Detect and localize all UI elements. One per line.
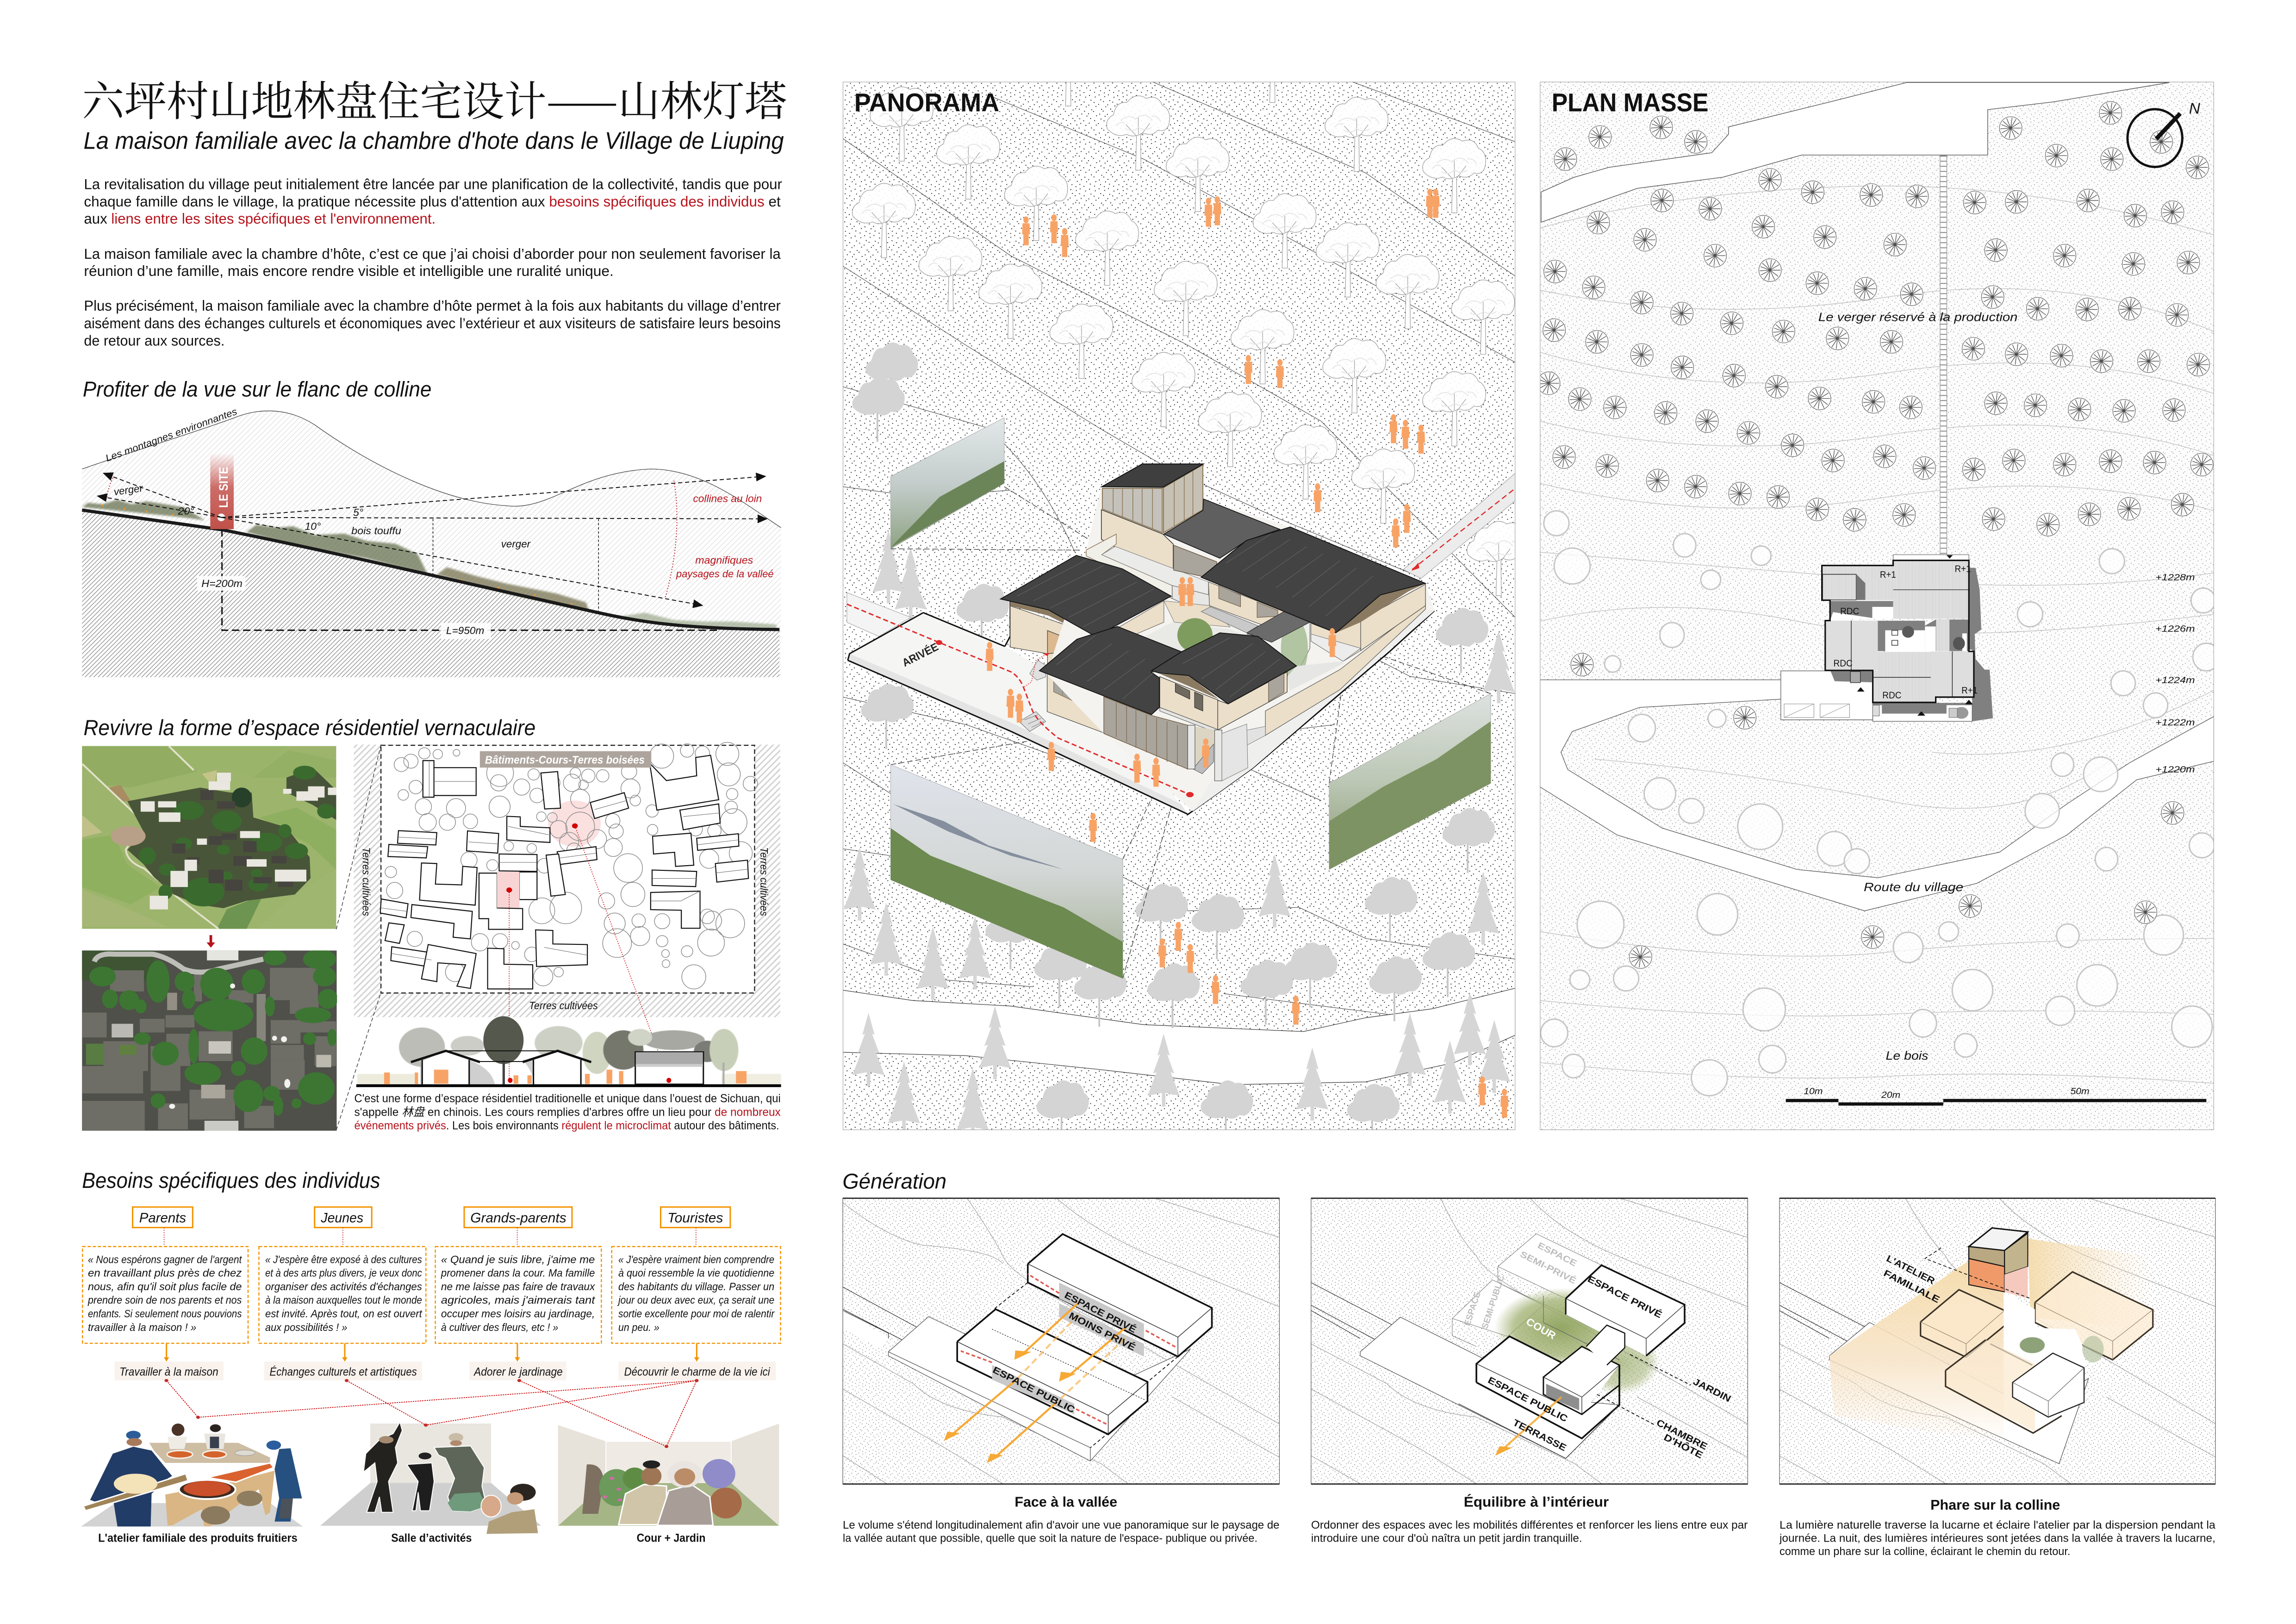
caption: equilibre: Équilibre à l’intérieur xyxy=(1464,1494,1609,1510)
persona: grands-parents: Adorer le jardinage xyxy=(473,1366,563,1378)
volumes xyxy=(1921,1290,2004,1357)
section diagram: hillside view: H=200m xyxy=(201,578,243,589)
forest trees xyxy=(1541,511,2220,1096)
section diagram: hillside view: verger xyxy=(113,482,144,498)
labels: elevations: +1220m xyxy=(2155,765,2195,775)
panel: face a la vallee xyxy=(843,1198,1279,1484)
thin volumes xyxy=(1452,1234,1601,1337)
text: linpan caption: s'appelle 林盘 en chinois. Les cours remplies d'arbres offre un lieu pour de nombreux xyxy=(355,1106,781,1118)
persona: touristes: Touristes xyxy=(667,1210,723,1225)
section diagram: hillside view: Les montagnes environnantes xyxy=(104,406,239,464)
village road xyxy=(1540,680,2214,911)
diagram: map of linpan xyxy=(336,743,780,1130)
labels: elevations: +1224m xyxy=(2155,675,2195,685)
persona: jeunes: Échanges culturels et artistiques xyxy=(270,1366,417,1378)
front walls xyxy=(1104,672,1287,781)
persona: parents: « Nous espérons gagner de l'argent xyxy=(88,1254,243,1266)
labels: plan: Le verger réservé à la production xyxy=(1818,310,2017,324)
arrow: red down xyxy=(206,935,215,948)
scene captions: Cour + Jardin xyxy=(637,1532,705,1545)
caption: face a la vallee: Face à la vallée xyxy=(1014,1494,1117,1510)
labels: plan: Le bois xyxy=(1886,1049,1928,1062)
labels: volumes 2: ESPACE xyxy=(1462,1291,1483,1327)
labels: floors: RDC xyxy=(1840,606,1859,617)
subtitle: La maison familiale avec la chambre d'hote dans le Village de Liuping xyxy=(83,127,784,154)
intro text: chaque famille dans le village, la pratique nécessite plus d'attention aux besoins spécifiques des individus et xyxy=(84,193,781,210)
marker: le site xyxy=(210,453,234,529)
scene captions: L'atelier familiale des produits fruitiers xyxy=(98,1532,298,1545)
scale bar xyxy=(1786,1100,2206,1104)
caption: phare: comme un phare sur la colline, éclairant le chemin du retour. xyxy=(1780,1545,2070,1558)
text: linpan caption: événements privés. Les bois environnants régulent le microclimat autour des bâtiments. xyxy=(355,1119,779,1132)
orchard trees xyxy=(852,28,1530,596)
caption: equilibre xyxy=(1311,1494,1748,1545)
section diagram: hillside view: 20° xyxy=(178,505,194,517)
labels: volumes 2: CHAMBRE xyxy=(1655,1418,1709,1452)
persona: grands-parents xyxy=(436,1207,601,1380)
marker: le site: LE SITE xyxy=(217,467,230,508)
persona: touristes: jour ou deux avec eux, ça serait une xyxy=(617,1294,774,1306)
orchard trees xyxy=(1537,101,2213,968)
labels: floors: R+1 xyxy=(1880,570,1896,580)
heading: besoins: Besoins spécifiques des individus xyxy=(82,1168,380,1193)
labels: volumes 2: SEMI-PRIVÉ xyxy=(1518,1249,1578,1286)
labels: elevations: +1222m xyxy=(2155,718,2195,728)
footprint xyxy=(1047,463,1434,811)
scene: salle xyxy=(320,1422,541,1534)
intro text: La revitalisation du village peut initialement être lancée par une planification de la collectivité, tandis que pour xyxy=(84,175,782,192)
scene: cour et jardin xyxy=(558,1424,779,1526)
heading: vue: Profiter de la vue sur le flanc de colline xyxy=(83,377,431,401)
title: 六坪村山地林盘住宅设计——山林灯塔 xyxy=(82,68,787,128)
courtyard xyxy=(1120,582,1361,691)
links: needs to spaces xyxy=(164,1379,698,1448)
intro text: aux liens entre les sites spécifiques et l'environnement. xyxy=(84,210,436,227)
label: plan masse: PLAN MASSE xyxy=(1552,88,1708,117)
labels: volumes 2: ESPACE PUBLIC xyxy=(1486,1375,1569,1424)
persona: touristes: un peu. » xyxy=(618,1321,660,1333)
retaining wall xyxy=(1193,603,1434,811)
section diagram: hillside view: collines au loin xyxy=(693,493,762,504)
scenes xyxy=(81,1422,779,1534)
persona: grands-parents: ne me laisse pas faire de travaux xyxy=(441,1280,596,1293)
panel: phare sur la colline xyxy=(1780,1198,2215,1484)
labels: floors xyxy=(1834,564,1978,700)
route: arrival path xyxy=(847,604,1194,797)
persona: jeunes xyxy=(259,1207,426,1380)
light glow xyxy=(1829,1238,2156,1444)
photo: aerial linpan xyxy=(81,949,338,1131)
labels: volumes 1: ESPACE PRIVÉ xyxy=(1063,1290,1138,1335)
persona: touristes: « J'espère vraiment bien comprendre xyxy=(618,1254,774,1266)
persona: grands-parents: occuper mes loisirs au jardinage, xyxy=(441,1308,595,1320)
intro text xyxy=(84,175,782,349)
site slab xyxy=(1829,1323,2089,1464)
labels: terres cultivees: Terres cultivées xyxy=(758,847,770,916)
section diagram: hillside view: paysages de la valleé xyxy=(676,568,774,580)
section diagram: hillside view: L=950m xyxy=(446,625,484,636)
building xyxy=(1001,463,1434,811)
terrace xyxy=(1086,534,1217,612)
contour lines xyxy=(843,82,1516,1014)
label bands xyxy=(992,1282,1144,1414)
photo: valley view large xyxy=(890,765,1123,979)
caption: face a la vallee xyxy=(843,1494,1279,1545)
volumes xyxy=(889,1234,1212,1461)
section diagram: hillside view: bois touffu xyxy=(351,525,401,537)
persona: parents: prendre soin de nos parents et nos xyxy=(87,1294,242,1306)
callout dashes xyxy=(1597,1355,1691,1425)
labels: elevations: 20m xyxy=(1881,1090,1900,1100)
labels: volumes 2: ESPACE PRIVÉ xyxy=(1586,1274,1664,1320)
persona: parents: enfants. Si seulement nous pouvions xyxy=(88,1308,242,1320)
site plan building xyxy=(1781,555,1993,721)
compass: N xyxy=(2189,100,2201,117)
bold volumes xyxy=(1566,1265,1685,1356)
caption: face a la vallee: la vallée autant que possible, quelle que soit la nature de l'espace- publique ou privée. xyxy=(843,1532,1257,1545)
labels: elevations: +1226m xyxy=(2155,624,2195,634)
labels: plan xyxy=(1818,310,2017,1062)
grey forest trees xyxy=(844,343,1515,1149)
people xyxy=(986,189,1508,1118)
labels: volumes 2: TERRASSE xyxy=(1511,1418,1568,1453)
compass xyxy=(2128,100,2201,167)
sightlines xyxy=(98,474,766,630)
persona: jeunes: à la maison auxquelles tout le monde xyxy=(265,1294,422,1306)
text: linpan caption: C'est une forme d’espace résidentiel traditionelle et unique dans l’ouest de Sichuan, qui xyxy=(355,1092,781,1105)
scene: atelier xyxy=(81,1424,303,1526)
arrival road and slab xyxy=(847,593,1434,814)
label: atelier xyxy=(1882,1254,1941,1305)
persona: parents xyxy=(82,1207,248,1380)
caption: phare: journée. La nuit, des lumières intérieures sont jetées dans la vallée à travers la lucarne, xyxy=(1779,1532,2215,1545)
persona: touristes: des habitants du village. Passer un xyxy=(618,1280,774,1293)
labels: terres cultivees xyxy=(361,847,770,1012)
heading: vernaculaire: Revivre la forme d’espace résidentiel vernaculaire xyxy=(83,716,535,740)
west roof xyxy=(1001,556,1171,637)
orange arrows xyxy=(949,1303,1125,1458)
labels: elevations: 50m xyxy=(2070,1086,2090,1096)
section diagram: hillside view: 5° xyxy=(353,506,363,518)
persona: grands-parents: Grands-parents xyxy=(470,1210,566,1225)
section diagram: hillside view xyxy=(82,406,781,677)
intro text: Plus précisément, la maison familiale avec la chambre d’hôte permet à la fois aux habitants du village d’entrer xyxy=(84,297,781,314)
caption: phare: La lumière naturelle traverse la lucarne et éclaire l'atelier par la dispersion pendant la xyxy=(1780,1519,2216,1531)
persona: jeunes: est invité. Après tout, on est ouvert xyxy=(265,1308,423,1320)
labels: floors: RDC xyxy=(1834,658,1853,668)
persona: jeunes: Jeunes xyxy=(320,1210,363,1225)
persona: jeunes: organiser des activités d'échanges xyxy=(265,1280,422,1293)
persona: jeunes: aux possibilités ! » xyxy=(265,1321,347,1333)
persona: touristes xyxy=(612,1207,780,1380)
persona: grands-parents: promener dans la cour. Ma famille xyxy=(441,1267,595,1279)
labels: plan: Route du village xyxy=(1864,880,1963,894)
labels: volumes 1: MOINS PRIVÉ xyxy=(1067,1310,1137,1353)
panel: equilibre a l'interieur xyxy=(1311,1198,1748,1484)
persona: parents: nous, afin qu'il soit plus facile de xyxy=(88,1280,242,1293)
labels: volumes 2: SEMI-PUBLIC xyxy=(1480,1274,1506,1330)
labels: elevations xyxy=(1804,573,2195,1100)
labels: volumes 1: ESPACE PUBLIC xyxy=(991,1365,1076,1415)
photo: valley view right xyxy=(1329,693,1491,869)
persona: grands-parents: agricoles, mais j'aimerais tant xyxy=(441,1294,596,1306)
top road xyxy=(1541,82,2169,222)
labels: floors: R+1 xyxy=(1955,564,1971,575)
site slab xyxy=(1360,1317,1619,1458)
photo: valley view small xyxy=(890,418,1004,549)
panel: panorama xyxy=(843,28,1530,1149)
intro text: réunion d’une famille, mais encore rendre visible et intelligible une ruralité unique. xyxy=(84,262,614,279)
scene captions xyxy=(98,1532,705,1545)
red flow arrows xyxy=(961,1274,1177,1424)
courtyard green xyxy=(1494,1288,1660,1394)
persona: jeunes: et à des arts plus divers, je veux donc xyxy=(265,1267,422,1279)
caption: phare: Phare sur la colline xyxy=(1930,1497,2060,1513)
labels: elevations: +1228m xyxy=(2155,573,2195,583)
persona: grands-parents: à cultiver des fleurs, etc ! » xyxy=(441,1321,558,1333)
persona: touristes: à quoi ressemble la vie quotidienne xyxy=(618,1267,774,1279)
label: batiments: Bâtiments-Cours-Terres boisées xyxy=(485,755,645,767)
contours xyxy=(1540,186,2214,1083)
label: panorama: PANORAMA xyxy=(854,88,999,117)
labels: volumes 2: JARDIN xyxy=(1691,1377,1732,1404)
front roofs xyxy=(1039,626,1296,714)
text: linpan caption xyxy=(355,1092,781,1132)
stairs xyxy=(1403,473,1516,578)
photo: aerial village xyxy=(82,746,336,929)
diagram: section of vernacular house xyxy=(356,1016,781,1087)
persona: touristes: Découvrir le charme de la vie ici xyxy=(624,1366,771,1378)
intro text: La maison familiale avec la chambre d’hôte, c’est ce que j’ai choisi d’aborder pour non seulement favoriser la xyxy=(84,245,781,262)
labels: floors: RDC xyxy=(1882,690,1901,700)
building: left wing wall xyxy=(1010,602,1104,733)
labels: volumes 2: ESPACE xyxy=(1536,1241,1578,1268)
roads xyxy=(843,988,1516,1085)
labels: volumes 2 xyxy=(1462,1241,1732,1461)
east wing xyxy=(1201,527,1425,650)
labels: volumes 1 xyxy=(991,1290,1138,1415)
labels: floors: R+1 xyxy=(1961,686,1978,696)
labels: volumes 2: D'HÔTE xyxy=(1662,1431,1705,1461)
panel: plan masse xyxy=(1537,82,2220,1130)
persona: jeunes: « J'espère être exposé à des cultures xyxy=(265,1254,422,1266)
persona: parents: en travaillant plus près de chez xyxy=(88,1267,242,1279)
section diagram: hillside view: verger xyxy=(501,538,531,550)
persona: parents: Travailler à la maison xyxy=(119,1366,218,1378)
persona: grands-parents: « Quand je suis libre, j'aime me xyxy=(441,1254,595,1266)
stair path xyxy=(1940,156,1947,559)
caption: phare xyxy=(1779,1497,2216,1558)
caption: face a la vallee: Le volume s'étend longitudinalement afin d'avoir une vue panoramique sur le paysage de xyxy=(843,1519,1279,1531)
section diagram: hillside view: magnifiques xyxy=(695,554,753,566)
lantern tower xyxy=(1969,1228,2028,1299)
labels: terres cultivees: Terres cultivées xyxy=(529,999,598,1012)
mid roof xyxy=(1164,499,1280,558)
heading: generation: Génération xyxy=(842,1169,946,1193)
caption: equilibre: Ordonner des espaces avec les mobilités différentes et renforcer les liens entre eux par xyxy=(1311,1519,1748,1531)
labels: terres cultivees: Terres cultivées xyxy=(361,847,373,916)
section diagram: hillside view: 10° xyxy=(305,521,321,532)
tower xyxy=(1101,464,1203,569)
intro text: aisément dans des échanges culturels et économiques avec l’extérieur et aux visiteurs de satisfaire leurs besoins xyxy=(84,315,781,331)
scene captions: Salle d’activités xyxy=(391,1532,472,1545)
caption: equilibre: introduire une cour d'où naîtra un petit jardin tranquille. xyxy=(1311,1532,1582,1545)
persona: touristes: sortie excellente pour moi de ralentir xyxy=(618,1308,775,1320)
persona: parents: Parents xyxy=(139,1210,186,1225)
label: atelier: FAMILIALE xyxy=(1882,1268,1941,1305)
orange arrow xyxy=(1501,1397,1562,1450)
label: atelier: L'ATELIER xyxy=(1885,1254,1936,1287)
persona: parents: travailler à la maison ! » xyxy=(88,1321,196,1333)
labels: volumes 2: COUR xyxy=(1524,1316,1558,1342)
label: arrivee: ARIVÉE xyxy=(900,640,940,669)
intro text: de retour aux sources. xyxy=(84,332,224,349)
labels: elevations: 10m xyxy=(1804,1086,1823,1096)
view connectors xyxy=(890,487,1491,979)
